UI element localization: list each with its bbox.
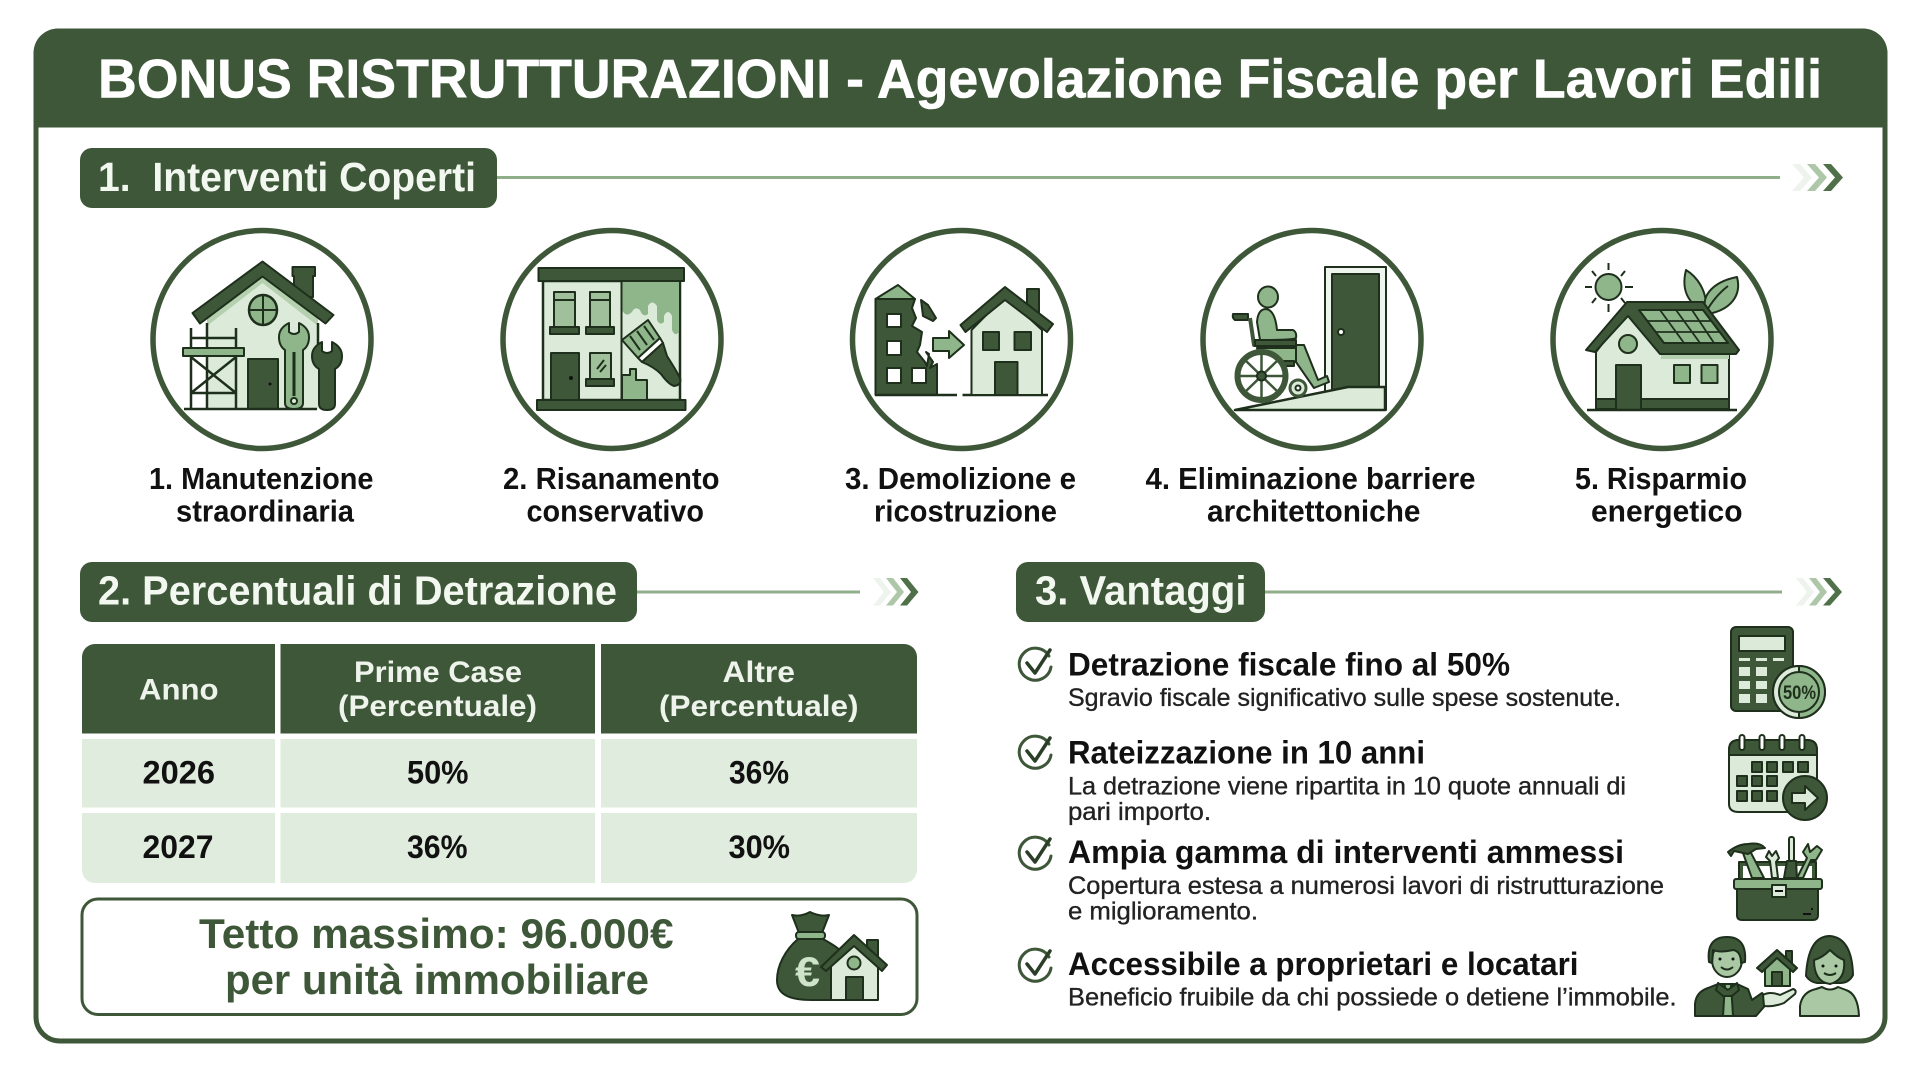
- table: detraction percentages: [82, 644, 917, 883]
- benefit: accessibile: Beneficio fruibile da chi possiede o detiene l’immobile.: [1068, 984, 1676, 1012]
- title: [34, 28, 1888, 128]
- table: detraction percentages: 50%: [407, 754, 468, 790]
- label: eliminazione barriere architettoniche: architettoniche: [1207, 494, 1420, 528]
- benefit: accessibile: Accessibile a proprietari e locatari: [1068, 946, 1578, 982]
- benefit: ampia gamma: [1019, 834, 1664, 926]
- table: detraction percentages: Prime Case: [354, 656, 522, 689]
- icon: money bag and house: [777, 912, 887, 1000]
- label: manutenzione straordinaria: [149, 461, 374, 528]
- icon: toolbox: [1728, 837, 1822, 920]
- label: eliminazione barriere architettoniche: [1146, 461, 1476, 528]
- label: risparmio energetico: energetico: [1591, 494, 1742, 528]
- heading: section 2: 2. Percentuali di Detrazione: [98, 568, 617, 614]
- heading: section 3: [1016, 562, 1842, 622]
- icon: money bag and house: €: [795, 948, 820, 995]
- heading: section 1: [80, 148, 1843, 208]
- icon: owner, tenant and house: [1695, 936, 1859, 1016]
- label: manutenzione straordinaria: 1. Manutenzione: [149, 461, 374, 496]
- label: risanamento conservativo: conservativo: [526, 494, 704, 528]
- benefit: ampia gamma: e miglioramento.: [1068, 898, 1258, 926]
- callout: maximum ceiling: per unità immobiliare: [225, 956, 649, 1003]
- benefit: detrazione fiscale: Detrazione fiscale fino al 50%: [1068, 646, 1510, 682]
- label: eliminazione barriere architettoniche: 4. Eliminazione barriere: [1146, 461, 1476, 496]
- label: demolizione e ricostruzione: ricostruzione: [874, 494, 1057, 528]
- label: manutenzione straordinaria: straordinaria: [176, 494, 355, 528]
- icon: check: [1019, 648, 1051, 680]
- table: detraction percentages: 36%: [407, 829, 468, 865]
- table: detraction percentages: (Percentuale): [338, 690, 537, 723]
- icon: check: [1019, 736, 1051, 768]
- callout: maximum ceiling: Tetto massimo: 96.000€: [199, 910, 674, 957]
- label: risparmio energetico: 5. Risparmio: [1575, 461, 1747, 496]
- title: BONUS RISTRUTTURAZIONI - Agevolazione Fiscale per Lavori Edili: [98, 48, 1822, 110]
- icon: calendar with arrow: [1729, 735, 1827, 820]
- benefit: detrazione fiscale: [1019, 646, 1621, 712]
- icon: green house with solar panels: [1553, 230, 1771, 448]
- label: demolizione e ricostruzione: 3. Demolizione e: [845, 461, 1076, 496]
- icon: calculator with 50%: 50%: [1783, 683, 1816, 704]
- benefit: rateizzazione: La detrazione viene ripartita in 10 quote annuali di: [1068, 772, 1626, 800]
- heading: section 3: 3. Vantaggi: [1035, 568, 1246, 614]
- benefit: accessibile: [1019, 946, 1676, 1012]
- table: detraction percentages: Anno: [139, 674, 218, 706]
- benefit: rateizzazione: pari importo.: [1068, 798, 1211, 826]
- table: detraction percentages: 2026: [142, 754, 215, 790]
- benefit: ampia gamma: Copertura estesa a numerosi lavori di ristrutturazione: [1068, 872, 1664, 900]
- table: detraction percentages: Altre: [722, 656, 795, 689]
- benefit: rateizzazione: Rateizzazione in 10 anni: [1068, 734, 1425, 770]
- icon: calculator with 50%: [1731, 627, 1825, 718]
- callout: maximum ceiling: [82, 899, 917, 1014]
- heading: section 2: [80, 562, 918, 622]
- icon: house with scaffolding and wrenches: [153, 230, 371, 448]
- label: demolizione e ricostruzione: [845, 461, 1076, 528]
- label: risparmio energetico: [1575, 461, 1747, 528]
- icon: demolition and reconstruction: [852, 230, 1070, 448]
- icon: check: [1019, 949, 1051, 981]
- benefit: ampia gamma: Ampia gamma di interventi ammessi: [1068, 834, 1624, 870]
- table: detraction percentages: 30%: [728, 829, 790, 865]
- table: detraction percentages: 2027: [142, 829, 214, 865]
- label: risanamento conservativo: [503, 461, 720, 528]
- table: detraction percentages: 36%: [729, 754, 789, 790]
- benefit: rateizzazione: [1019, 734, 1626, 826]
- icon: wheelchair ramp and door: [1203, 230, 1421, 448]
- benefit: detrazione fiscale: Sgravio fiscale significativo sulle spese sostenute.: [1068, 684, 1621, 712]
- icon: check: [1019, 837, 1051, 869]
- heading: section 1: 1. Interventi Coperti: [98, 154, 476, 200]
- label: risanamento conservativo: 2. Risanamento: [503, 461, 720, 496]
- table: detraction percentages: (Percentuale): [659, 690, 858, 723]
- icon: building being repainted: [503, 230, 721, 448]
